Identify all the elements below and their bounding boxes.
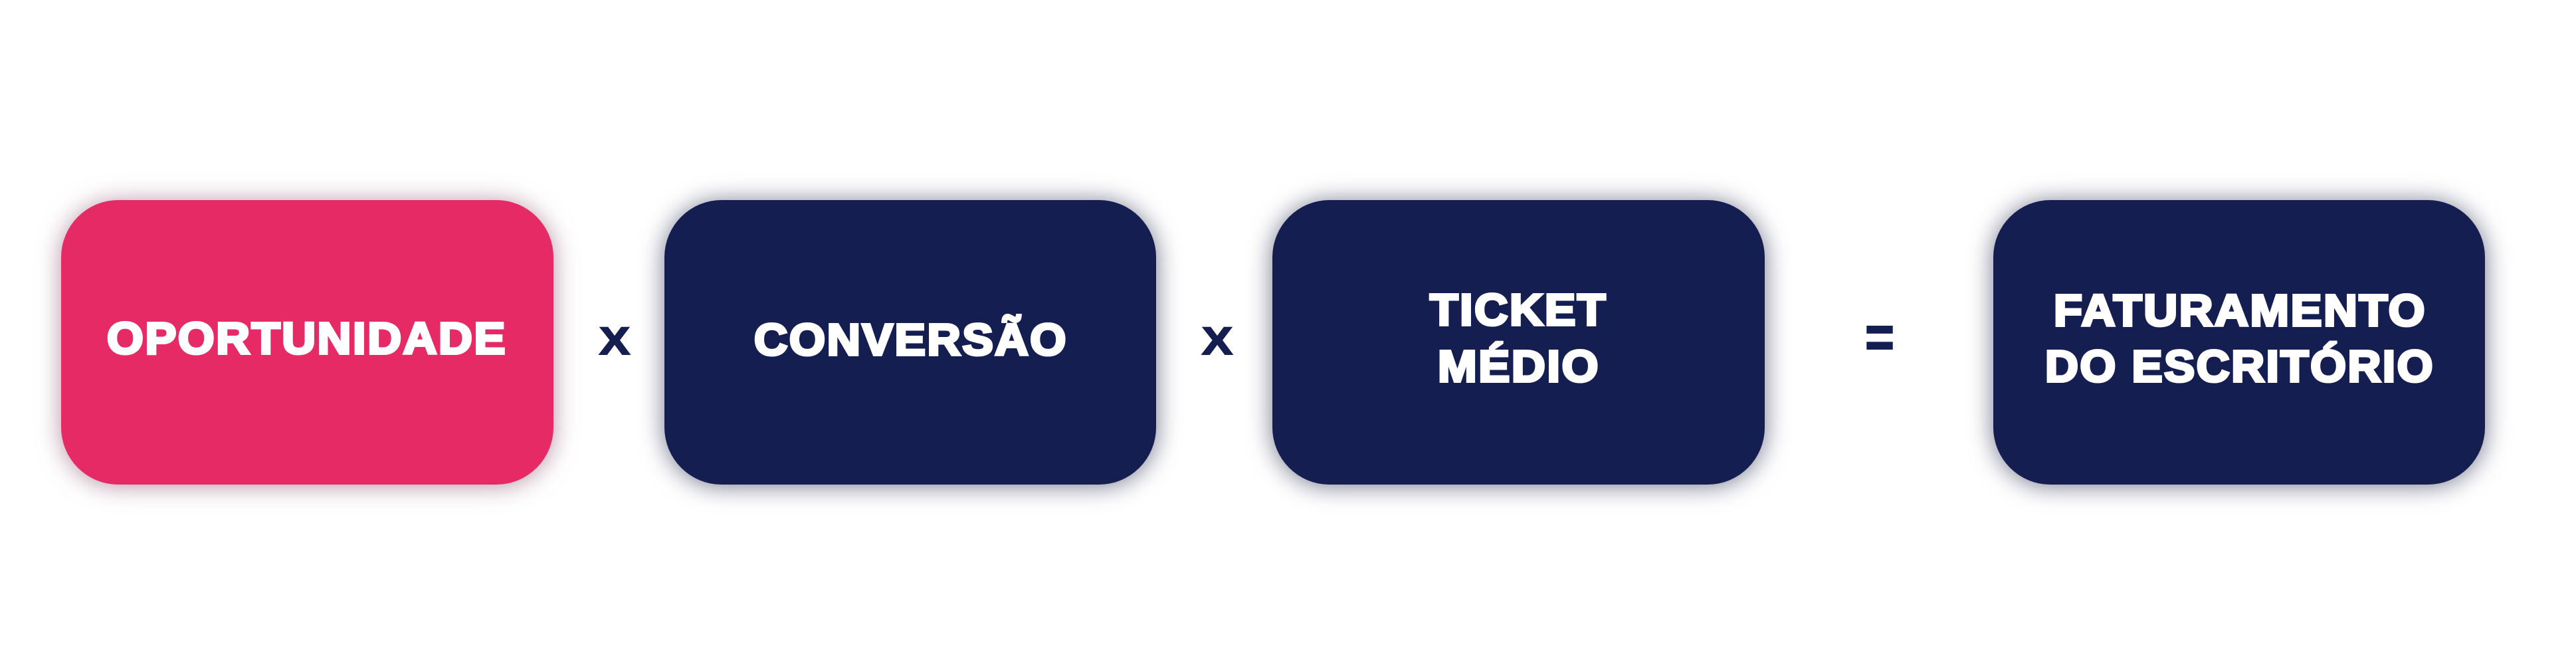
panel: faturamento do escritório [1993, 200, 2485, 485]
panel: oportunidade: OPORTUNIDADE [107, 314, 507, 364]
panel: ticket médio: TICKET [1430, 285, 1607, 335]
operator: multiply: X [599, 320, 630, 363]
panel: ticket médio: MÉDIO [1438, 342, 1600, 392]
panel: conversão: CONVERSÃO [754, 315, 1068, 365]
panel: ticket médio [1272, 200, 1765, 485]
panel: faturamento do escritório: DO ESCRITÓRIO [2045, 342, 2434, 392]
panel: oportunidade [61, 200, 553, 485]
operator: multiply: X [1202, 320, 1233, 363]
operator: equals: = [1865, 304, 1894, 371]
panel: conversão [664, 200, 1156, 485]
panel: faturamento do escritório: FATURAMENTO [2054, 286, 2427, 336]
